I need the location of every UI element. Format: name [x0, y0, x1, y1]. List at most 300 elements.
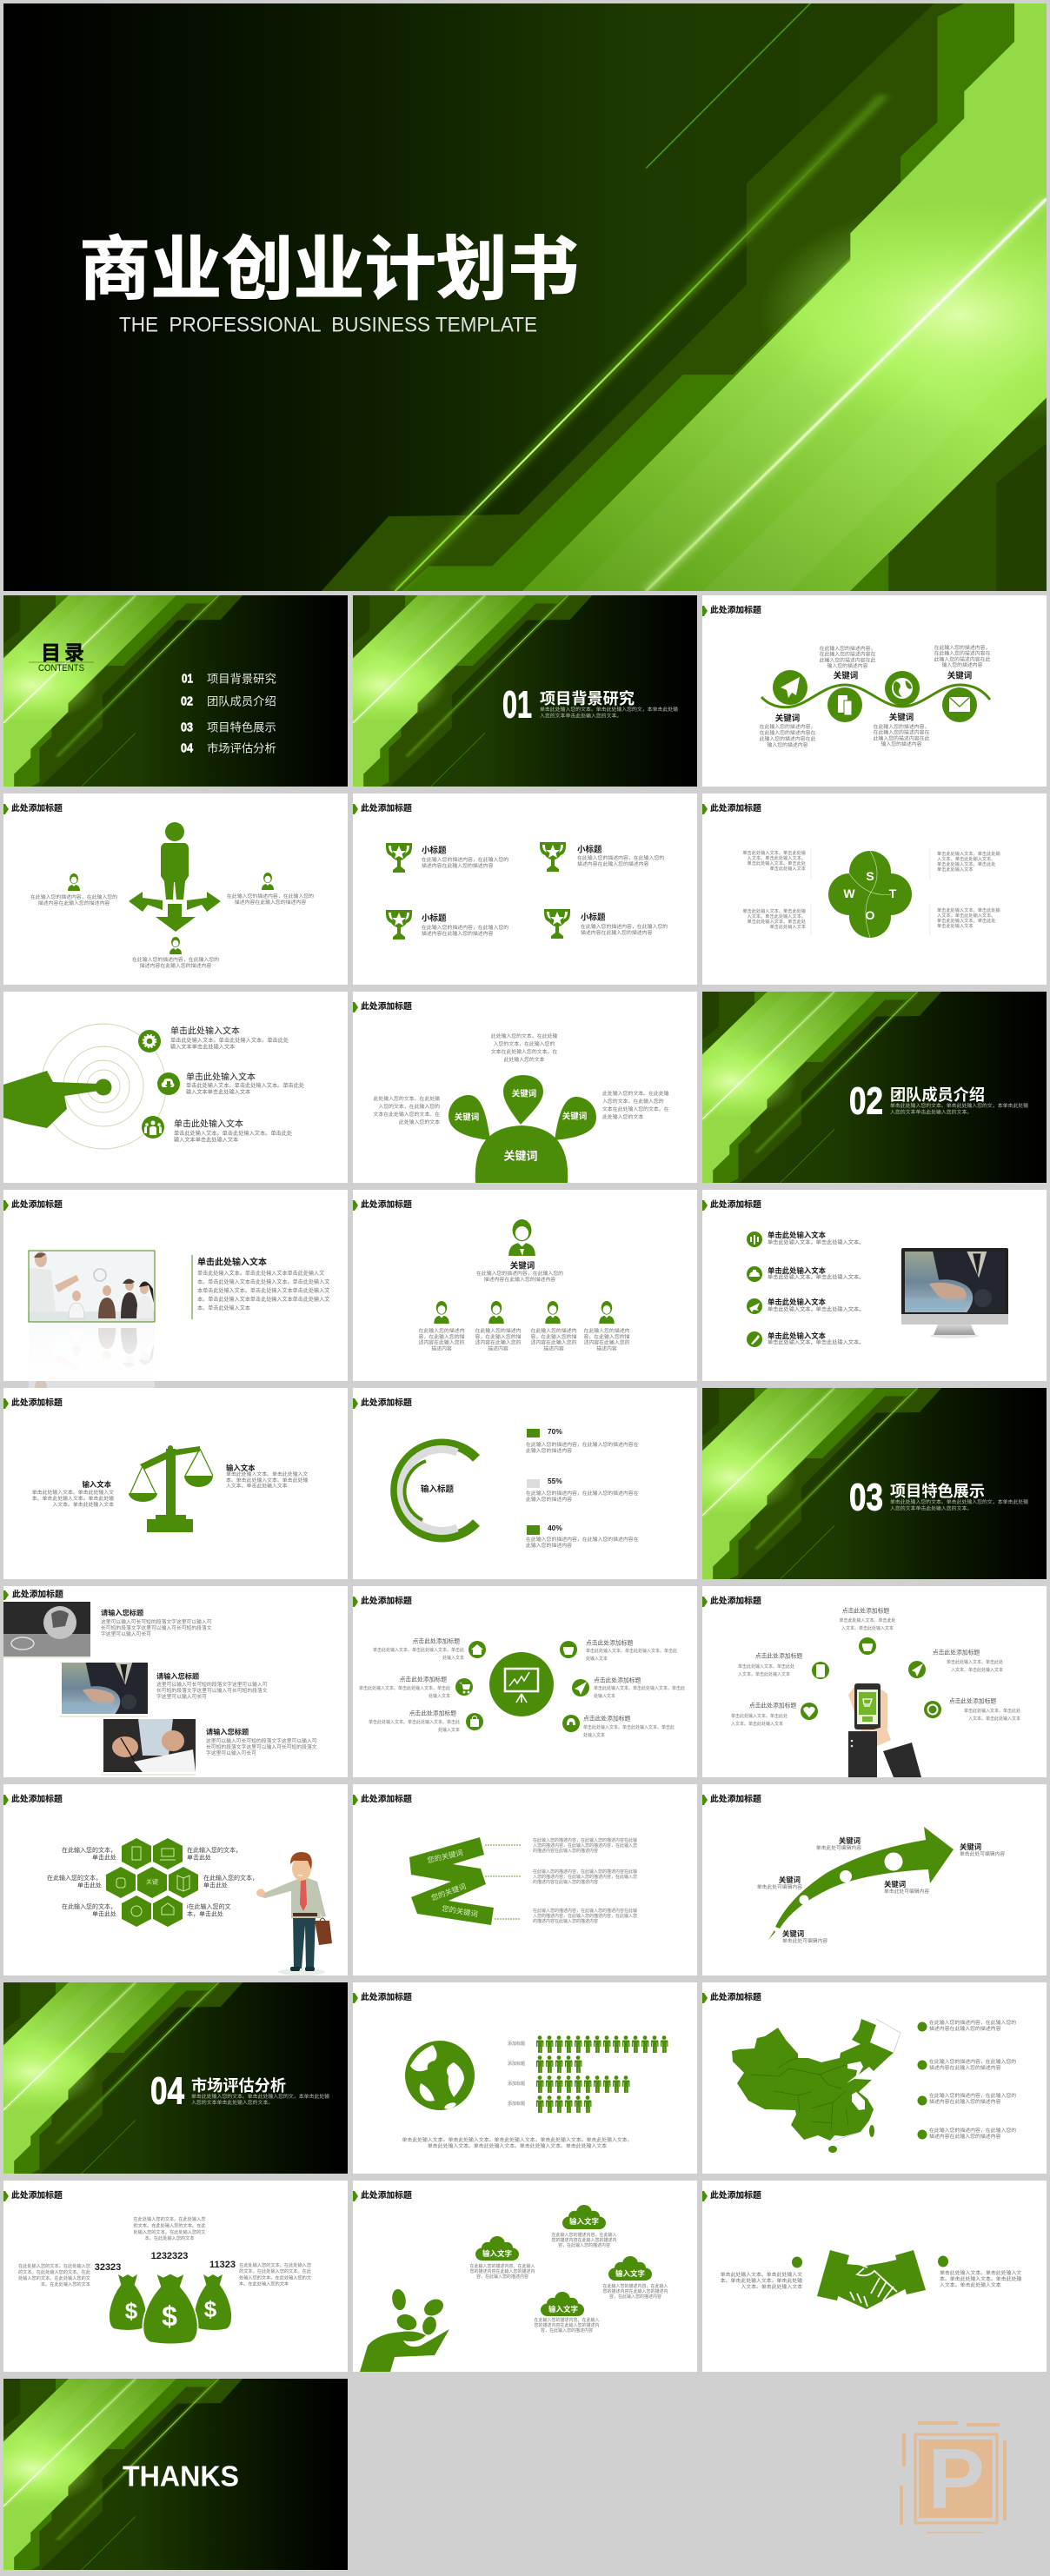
title: 商业创业计划书: [79, 231, 579, 308]
SWOT texts: 单击此处输入文本。单击此处: [748, 860, 806, 866]
hexagon labels: 本，单击此处: [187, 1909, 223, 1917]
text items: 输入文本单击此处输入文本: [174, 1136, 238, 1143]
slide title: 此处添加标题: [361, 2189, 412, 2201]
cloud descriptions: 容，在此输入您的描述内容: [558, 2242, 610, 2248]
panel: section 03: [702, 1388, 1047, 1579]
icon: coins: [390, 2287, 447, 2337]
slide title: 此处添加标题: [361, 1595, 412, 1606]
panel: hand with coins and clouds: [353, 2181, 697, 2372]
keyword blocks: 输入您的描述内容: [941, 661, 983, 668]
descriptions: 在此输入您的描述内容，在此输入您的: [132, 956, 219, 963]
trophy texts: 描述内容在此输入您的描述内容: [422, 930, 494, 937]
photo: team meeting: [29, 1251, 155, 1322]
people icons: [68, 873, 274, 954]
hub texts: [359, 1637, 685, 1738]
arrow labels: 单击此处可编辑内容: [960, 1850, 1005, 1857]
photo captions: 字这里可以输入可长可: [101, 1630, 151, 1637]
petal labels: 关键词: [512, 1088, 536, 1099]
panel: three photos with text: [3, 1586, 348, 1777]
team descriptions: 在此输入您的描述内: [530, 1327, 577, 1334]
panel: photo with text: [3, 1190, 348, 1396]
slide title: [702, 1793, 761, 1805]
SWOT texts: 入文本。单击此处输入文本。: [748, 913, 806, 920]
arrow labels: [757, 1836, 1005, 1944]
team descriptions: 容，在此输入您的描: [475, 1333, 522, 1340]
slide title: [702, 1198, 761, 1211]
descriptions: 处输入您的文本。在此处输入您的文: [133, 2228, 206, 2235]
map legend: 描述内容在此输入您的描述内容: [929, 2025, 1001, 2032]
contents list: 01: [182, 671, 193, 687]
left text: 入文本。单击此处输入文本: [741, 2283, 802, 2290]
photo captions: 字这里可以输入可长可: [206, 1749, 256, 1756]
slide title: [353, 2189, 412, 2201]
section text: 入您的文本单击此处输入您的文本。: [540, 713, 621, 720]
leader text: 描述内容在此输入您的描述内容: [484, 1276, 555, 1283]
team descriptions: 述内容在此输入您的: [530, 1339, 577, 1346]
section heading: 市场评估分析: [191, 2076, 286, 2095]
SWOT texts: 单击此处输入文本: [769, 923, 806, 930]
hub texts: 处输入文本: [583, 1732, 605, 1738]
hub texts: 单击此处输入文本。单击此处输入文本。单击此: [359, 1685, 450, 1691]
panel: ring chart: [353, 1388, 697, 1579]
slide title: 此处添加标题: [710, 802, 761, 813]
map of China: [732, 2019, 900, 2153]
slide title: 此处添加标题: [361, 802, 412, 813]
team icons: [434, 1301, 615, 1324]
descriptions: 本。在此处输入您的文本: [144, 2234, 195, 2241]
keyword blocks: 此输入您的描述内容在此: [934, 655, 991, 662]
photo captions: 请输入您标题: [101, 1608, 143, 1617]
team descriptions: 在此输入您的描述内: [583, 1327, 630, 1334]
SWOT texts: 单击此处输入文本。单击此处输: [937, 850, 1000, 857]
trophy texts: 描述内容在此输入您的描述内容: [581, 929, 653, 936]
cloud descriptions: 容，在此输入您的描述内容: [541, 2327, 593, 2334]
petal descriptions: 文本在此处输入您的文本。在: [373, 1111, 440, 1118]
team descriptions: 描述内容: [431, 1344, 452, 1351]
panel: petal diagram: [353, 992, 697, 1183]
slide title: [702, 802, 761, 814]
descriptions: 在此处输入您的文本。在此处输入您: [133, 2215, 206, 2222]
keyword blocks: 在此输入您的描述内容在: [934, 650, 991, 657]
ribbon: 您的关键词: [430, 1882, 467, 1902]
list text: 单击此处输入文本。单击此处输入文本。: [768, 1274, 864, 1281]
icon: scales: [129, 1445, 213, 1532]
hexagon labels: 在此输入您的文本，: [47, 1874, 102, 1881]
ribbon: [409, 1837, 494, 1925]
slide title: [3, 802, 63, 814]
photo captions: [101, 1608, 317, 1756]
panel: wave with four keywords: [702, 595, 1047, 787]
item texts: 点击此处添加标题: [842, 1606, 889, 1615]
icon: people: [142, 1116, 164, 1139]
petal descriptions: 此处输入您的文本: [503, 1056, 545, 1063]
icon: envelope: [942, 687, 977, 722]
keyword blocks: 关键词: [889, 713, 914, 723]
item texts: 单击此处输入文本。单击此处: [947, 1659, 1003, 1665]
arrow labels: 关键词: [960, 1842, 981, 1851]
descriptions: 在此处输入您的文本。在此处输入您: [18, 2262, 90, 2269]
SWOT texts: 单击此处输入文本。单击此处: [937, 860, 995, 867]
list text: 单击此处输入文本。单击此处输入文本。: [768, 1239, 864, 1246]
panel: target with pointing hand: [3, 992, 348, 1183]
slide title: 此处添加标题: [361, 1198, 412, 1210]
petal descriptions: 入您的文本，在此输入您的: [378, 1103, 440, 1110]
photo captions: 长可短的段落文字这里可以输入可长可短的段落文: [101, 1624, 212, 1631]
trophy texts: 在此输入您的描述内容，在此输入您的: [577, 854, 664, 861]
ribbon descriptions: 入您的描述内容，在此输入您的描述内容，在此输入您: [533, 1913, 637, 1919]
panel: SWOT: [702, 793, 1047, 985]
panel: section 02: [702, 992, 1047, 1183]
icon: standing figure: [161, 822, 189, 900]
map legend: 在此输入您的描述内容，在此输入您的: [929, 2127, 1016, 2134]
photo captions: 请输入您标题: [156, 1672, 199, 1681]
text block: 本单击此处输入文本。单击此处输入文本单击此处输入文: [197, 1286, 329, 1293]
hexagon labels: 在此输入您的文本，: [62, 1902, 116, 1910]
contents list: 02: [181, 694, 193, 709]
SWOT clover: O: [866, 908, 875, 922]
photo captions: 这里可以输入可长可短的段落文字这里可以输入可: [101, 1618, 212, 1625]
cloud descriptions: 在此输入您的描述内容，在此输入: [551, 2232, 617, 2238]
photo captions: 长可短的段落文字这里可以输入可长可短的段落文: [156, 1687, 268, 1694]
panel: globe with people bars: [353, 1982, 697, 2174]
item texts: 入文本。单击此处输入文本: [731, 1721, 783, 1727]
slide title: 此处添加标题: [12, 1589, 63, 1599]
hexagon labels: 单击此处: [92, 1909, 116, 1917]
descriptions: 在此输入您的描述内容，在此输入您的: [30, 893, 117, 900]
descriptions: 在此处输入您的文本。在此处输入您: [239, 2261, 311, 2268]
right text: 入文本。单击此处输入文本: [226, 1483, 288, 1490]
map legend: 描述内容在此输入您的描述内容: [929, 2064, 1001, 2071]
slide title: [353, 1198, 412, 1211]
hub texts: 点击此处添加标题: [583, 1714, 631, 1723]
descriptions: [30, 893, 314, 969]
slide title: [3, 1198, 63, 1211]
right text: 单击此处输入文本。单击此处输入文: [940, 2269, 1021, 2276]
contents list: 项目特色展示: [207, 720, 276, 734]
panel: money bags: [3, 2181, 348, 2372]
SWOT texts: 单击此处输入文本。单击此处: [937, 917, 995, 924]
SWOT clover: T: [889, 886, 897, 900]
contents list: 03: [181, 720, 193, 735]
cloud descriptions: 您的描述内容在此输入您的描述内: [534, 2322, 600, 2328]
SWOT texts: 单击此处输入文本。单击此处输: [742, 907, 807, 914]
contents list: [181, 671, 276, 756]
icon: globe: [885, 671, 920, 706]
trophy texts: 小标题: [422, 845, 447, 855]
hub texts: 点击此处添加标题: [409, 1709, 456, 1717]
right text: 入文本。单击此处输入文本: [940, 2281, 1001, 2288]
leader text: [476, 1260, 563, 1283]
keyword blocks: 关键词: [834, 671, 858, 681]
left text: [32, 1480, 114, 1508]
team descriptions: 容，在此输入您的描: [583, 1333, 630, 1340]
panel: hexagons with businessman: [3, 1784, 348, 1975]
panel: team organisation: [353, 1190, 697, 1381]
right text: 本。单击此处输入文本。单击此处输: [940, 2275, 1021, 2282]
left text: 单击此处输入文本。单击此处输入文: [721, 2271, 802, 2278]
icon: gear: [138, 1030, 161, 1052]
text items: 单击此处输入文本。单击此处输入文本。单击此处: [170, 1036, 289, 1043]
photo captions: 这里可以输入可长可短的段落文字这里可以输入可: [156, 1681, 268, 1688]
panel: handshake: [702, 2181, 1047, 2372]
hexagon labels: i在此输入您的文: [187, 1902, 231, 1910]
descriptions: 的文本。在此处输入您的文本。在此: [239, 2267, 312, 2274]
numbers: 1232323: [151, 2251, 188, 2261]
heading: contents: CONTENTS: [38, 663, 84, 674]
keyword blocks: 此输入您的描述内容在此: [874, 734, 930, 741]
trophy texts: 描述内容在此输入您的描述内容: [577, 860, 649, 867]
petal descriptions: 此处输入您的文本: [399, 1119, 440, 1125]
icon: handshake: [817, 2250, 926, 2309]
cloud labels: 输入文字: [569, 2217, 599, 2226]
cloud descriptions: 您的描述内容在此输入您的描述内: [551, 2237, 617, 2243]
list text: 单击此处输入文本。单击此处输入文本。: [768, 1338, 864, 1345]
icon: money bags: [110, 2274, 231, 2344]
panel: section 01: [353, 595, 697, 787]
text block: 单击此处输入文本。单击此处输入文本单击此处输入文: [197, 1269, 324, 1276]
text block: 单击此处输入文本: [197, 1257, 267, 1267]
pointing hand: [3, 1071, 111, 1128]
map legend: 在此输入您的描述内容，在此输入您的: [929, 2058, 1016, 2065]
petal descriptions: [373, 1032, 669, 1125]
hub texts: 单击此处输入文本。单击此处输入文本。单击此: [373, 1647, 464, 1653]
team descriptions: [418, 1327, 630, 1351]
keyword blocks: 在此输入您的描述内容，: [934, 644, 990, 651]
trophy texts: 小标题: [422, 913, 447, 923]
left text: 入文本。单击此处输入文本: [52, 1501, 114, 1508]
hub texts: 单击此处输入文本。单击此处输入文本。单击此: [594, 1685, 685, 1691]
slide title: 此处添加标题: [710, 2189, 761, 2201]
arrow labels: 关键词: [884, 1880, 906, 1889]
text items: 单击此处输入文本: [174, 1118, 243, 1130]
contents list: 项目背景研究: [207, 673, 276, 685]
item texts: 点击此处添加标题: [933, 1648, 980, 1656]
text block: [192, 1255, 329, 1319]
hub texts: 处输入文本: [586, 1656, 608, 1662]
keyword blocks: 关键词: [775, 713, 800, 723]
icon: presentation board: [489, 1652, 554, 1716]
legend: 70%: [548, 1427, 562, 1436]
hexagon cluster: 关键: [146, 1877, 158, 1886]
arrow labels: 关键词: [839, 1836, 861, 1845]
hexagon cluster: [106, 1838, 198, 1927]
left text: 本。单击此处输入文本。单击此处输: [721, 2277, 802, 2284]
left text: 单击此处输入文本。单击此处输入文: [32, 1489, 114, 1496]
leader text: 关键词: [510, 1260, 535, 1271]
petal labels: 关键词: [455, 1112, 479, 1123]
swoosh arrow: [768, 1827, 954, 1940]
section text: 单击此处输入您的文本。单击此处输入您的文，本单击此处输: [191, 2095, 329, 2100]
text items: 输入文本单击此处输入文本: [186, 1088, 250, 1095]
hexagon labels: 在此输入您的文本，: [62, 1846, 116, 1853]
legend: 40%: [548, 1524, 562, 1532]
hub texts: 处输入文本: [429, 1693, 450, 1699]
SWOT texts: [742, 849, 1000, 936]
icon: money bags: $: [125, 2298, 138, 2324]
item texts: 单击此处输入文本。单击此处: [731, 1713, 788, 1719]
list text: [768, 1231, 864, 1345]
item texts: 单击此处输入文本。单击此处: [738, 1663, 794, 1670]
left text: 输入文本: [82, 1480, 112, 1489]
ribbon descriptions: 入您的描述内容，在此输入您的描述内容，在此输入您: [533, 1874, 637, 1880]
slide title: 此处添加标题: [11, 2189, 63, 2201]
icon: globe: [405, 2041, 475, 2110]
petal labels: [455, 1088, 587, 1163]
panel: section 04: [3, 1982, 348, 2174]
arrow labels: 单击此处可编辑内容: [782, 1937, 827, 1944]
photo: signing: [101, 1719, 196, 1775]
list text: 单击此处输入文本: [768, 1298, 827, 1306]
list text: 单击此处输入文本: [768, 1266, 827, 1275]
hub texts: 单击此处输入文本。单击此处输入文本。单击此: [583, 1724, 675, 1730]
team descriptions: 述内容在此输入您的: [418, 1339, 465, 1346]
SWOT texts: 单击此处输入文本。单击此处: [748, 918, 806, 925]
ring chart: [395, 1444, 476, 1537]
team descriptions: 在此输入您的描述内: [418, 1327, 465, 1334]
left text: 本。单击此处输入文本。单击此处输: [32, 1495, 114, 1502]
slide title: [353, 1000, 412, 1012]
row labels: 添加标题: [508, 2081, 525, 2087]
trophy texts: 小标题: [577, 845, 602, 855]
keyword blocks: 输入您的描述内容: [767, 741, 808, 748]
hub texts: 点击此处添加标题: [413, 1637, 460, 1644]
item texts: 点击此处添加标题: [949, 1696, 996, 1705]
closing text: THANKS: [123, 2460, 239, 2493]
icon: hand: [360, 2329, 449, 2372]
numbers: [95, 2251, 236, 2273]
photo captions: 这里可以输入可长可短的段落文字这里可以输入可: [206, 1737, 317, 1744]
text items: 单击此处输入文本: [186, 1071, 256, 1083]
team descriptions: 描述内容: [488, 1344, 508, 1351]
slide title: [3, 1397, 63, 1409]
hexagon labels: 单击此处: [203, 1881, 228, 1889]
slide title: 此处添加标题: [361, 1991, 412, 2002]
text block: 本。单击此处输入文本: [197, 1304, 250, 1311]
slide title: [702, 604, 761, 616]
arrows: [129, 892, 221, 932]
heading: contents: 目录: [41, 641, 84, 664]
panel: person with three arrows: [3, 793, 348, 985]
section number: 01: [502, 683, 532, 727]
watermark stamp: P: [927, 2431, 985, 2526]
hub texts: 点击此处添加标题: [400, 1676, 447, 1683]
panel: China map: [702, 1982, 1047, 2174]
team descriptions: 容，在此输入您的描: [530, 1333, 577, 1340]
map legend: 描述内容在此输入您的描述内容: [929, 2098, 1001, 2105]
legend: [526, 1427, 639, 1549]
item texts: [731, 1606, 1020, 1727]
list text: 单击此处输入文本。单击此处输入文本。: [768, 1305, 864, 1312]
icon: cloud download: [157, 1072, 180, 1095]
cloud descriptions: 在此输入您的描述内容，在此输入: [469, 2263, 535, 2269]
cloud descriptions: 容，在此输入您的描述内容: [476, 2274, 528, 2280]
right text: [226, 1464, 308, 1490]
petals: [449, 1075, 596, 1183]
section text: 单击此处输入您的文本。单击此处输入您的文，本单击此处输: [540, 707, 678, 713]
cloud descriptions: 容，在此输入您的描述内容: [609, 2294, 661, 2300]
hub texts: 单击此处输入文本。单击此处输入文本。单击此: [369, 1719, 460, 1725]
item texts: 单击此处输入文本。单击此处: [964, 1708, 1020, 1714]
right text: 输入文本: [226, 1464, 256, 1472]
team descriptions: 述内容在此输入您的: [583, 1339, 630, 1346]
slide title: [353, 1991, 412, 2003]
slide title: 此处添加标题: [710, 1595, 761, 1606]
slide title: 此处添加标题: [710, 1991, 761, 2002]
descriptions: [18, 2215, 312, 2287]
petal labels: 关键词: [503, 1149, 538, 1163]
ribbon descriptions: 的描述内容在此输入您的描述内容: [533, 1879, 598, 1885]
satellite icons: [455, 1641, 589, 1732]
ribbon descriptions: 在此输入您的描述内容，在此输入您的描述内容在此输: [533, 1869, 637, 1875]
trophies: [386, 842, 570, 939]
slide title: [353, 1595, 412, 1607]
wave line: [761, 685, 990, 707]
slide title: 此处添加标题: [710, 604, 761, 615]
SWOT texts: 单击此处输入文本。单击此处输: [742, 849, 807, 856]
keyword blocks: 输入您的描述内容: [827, 662, 868, 669]
panel: zigzag ribbon: [353, 1784, 697, 1975]
trophy texts: 在此输入您的描述内容，在此输入您的: [422, 924, 508, 931]
panel: thanks slide: [3, 2379, 348, 2570]
legend: 在此输入您的描述内容，在此输入您的描述内容在: [526, 1441, 639, 1448]
hexagon labels: 在此输入您的文本，: [187, 1846, 242, 1853]
photo captions: 请输入您标题: [206, 1728, 249, 1736]
descriptions: 在此输入您的描述内容，在此输入您的: [227, 893, 314, 900]
chart label: 输入标题: [421, 1484, 454, 1495]
arrow labels: 单击此处可编辑内容: [757, 1883, 802, 1890]
row labels: [508, 2041, 525, 2107]
icon: paper plane: [773, 670, 807, 705]
slide title: [3, 1589, 63, 1600]
SWOT clover: [828, 851, 912, 938]
ribbon descriptions: [533, 1837, 637, 1924]
descriptions: 处输入您的文本。在此处输入您的文: [239, 2274, 312, 2281]
SWOT texts: 入文本。单击此处输入文本。: [937, 855, 995, 862]
trophy texts: 在此输入您的描述内容，在此输入您的: [581, 923, 668, 930]
arrow labels: 关键词: [782, 1929, 804, 1938]
hub texts: 处输入文本: [594, 1693, 615, 1699]
slide title: 此处添加标题: [11, 802, 63, 813]
slide title: 此处添加标题: [361, 1397, 412, 1408]
photo captions: 字这里可以输入可长可: [156, 1693, 207, 1700]
descriptions: 的文本。在此处输入您的文本。在此: [18, 2268, 91, 2275]
hexagon labels: 单击此处: [77, 1881, 102, 1889]
icon: leader: [508, 1219, 535, 1256]
list text: 单击此处输入文本: [768, 1331, 827, 1340]
petal descriptions: 此处输入您的文本: [602, 1113, 643, 1120]
slide title: [702, 1991, 761, 2003]
SWOT texts: 单击此处输入文本: [769, 865, 806, 872]
icon: hand holding phone: [848, 1683, 921, 1777]
arrow labels: 关键词: [779, 1876, 801, 1884]
cloud descriptions: 在此输入您的描述内容，在此输入: [602, 2283, 668, 2289]
keyword blocks: 关键词: [947, 671, 972, 681]
petal descriptions: 入您的文本，在此输入您的: [494, 1040, 555, 1047]
people pictogram rows: [536, 2035, 668, 2113]
descriptions: 本。在此处输入您的文本: [41, 2281, 90, 2287]
slide title: [702, 1595, 761, 1607]
team descriptions: 容，在此输入您的描: [418, 1333, 465, 1340]
numbers: 11323: [209, 2260, 236, 2270]
slide title: 此处添加标题: [11, 1397, 63, 1408]
hub texts: 单击此处输入文本。单击此处输入文本。单击此: [586, 1648, 677, 1654]
satellite icons: [801, 1637, 941, 1720]
keyword blocks: 在此输入您的描述内容在: [820, 651, 876, 658]
petal descriptions: 此处输入您的文本。在此处输: [491, 1032, 557, 1039]
contents list: 市场评估分析: [207, 740, 276, 754]
keyword blocks: 在此输入您的描述内容，: [874, 723, 929, 730]
slide title: [3, 1793, 63, 1805]
